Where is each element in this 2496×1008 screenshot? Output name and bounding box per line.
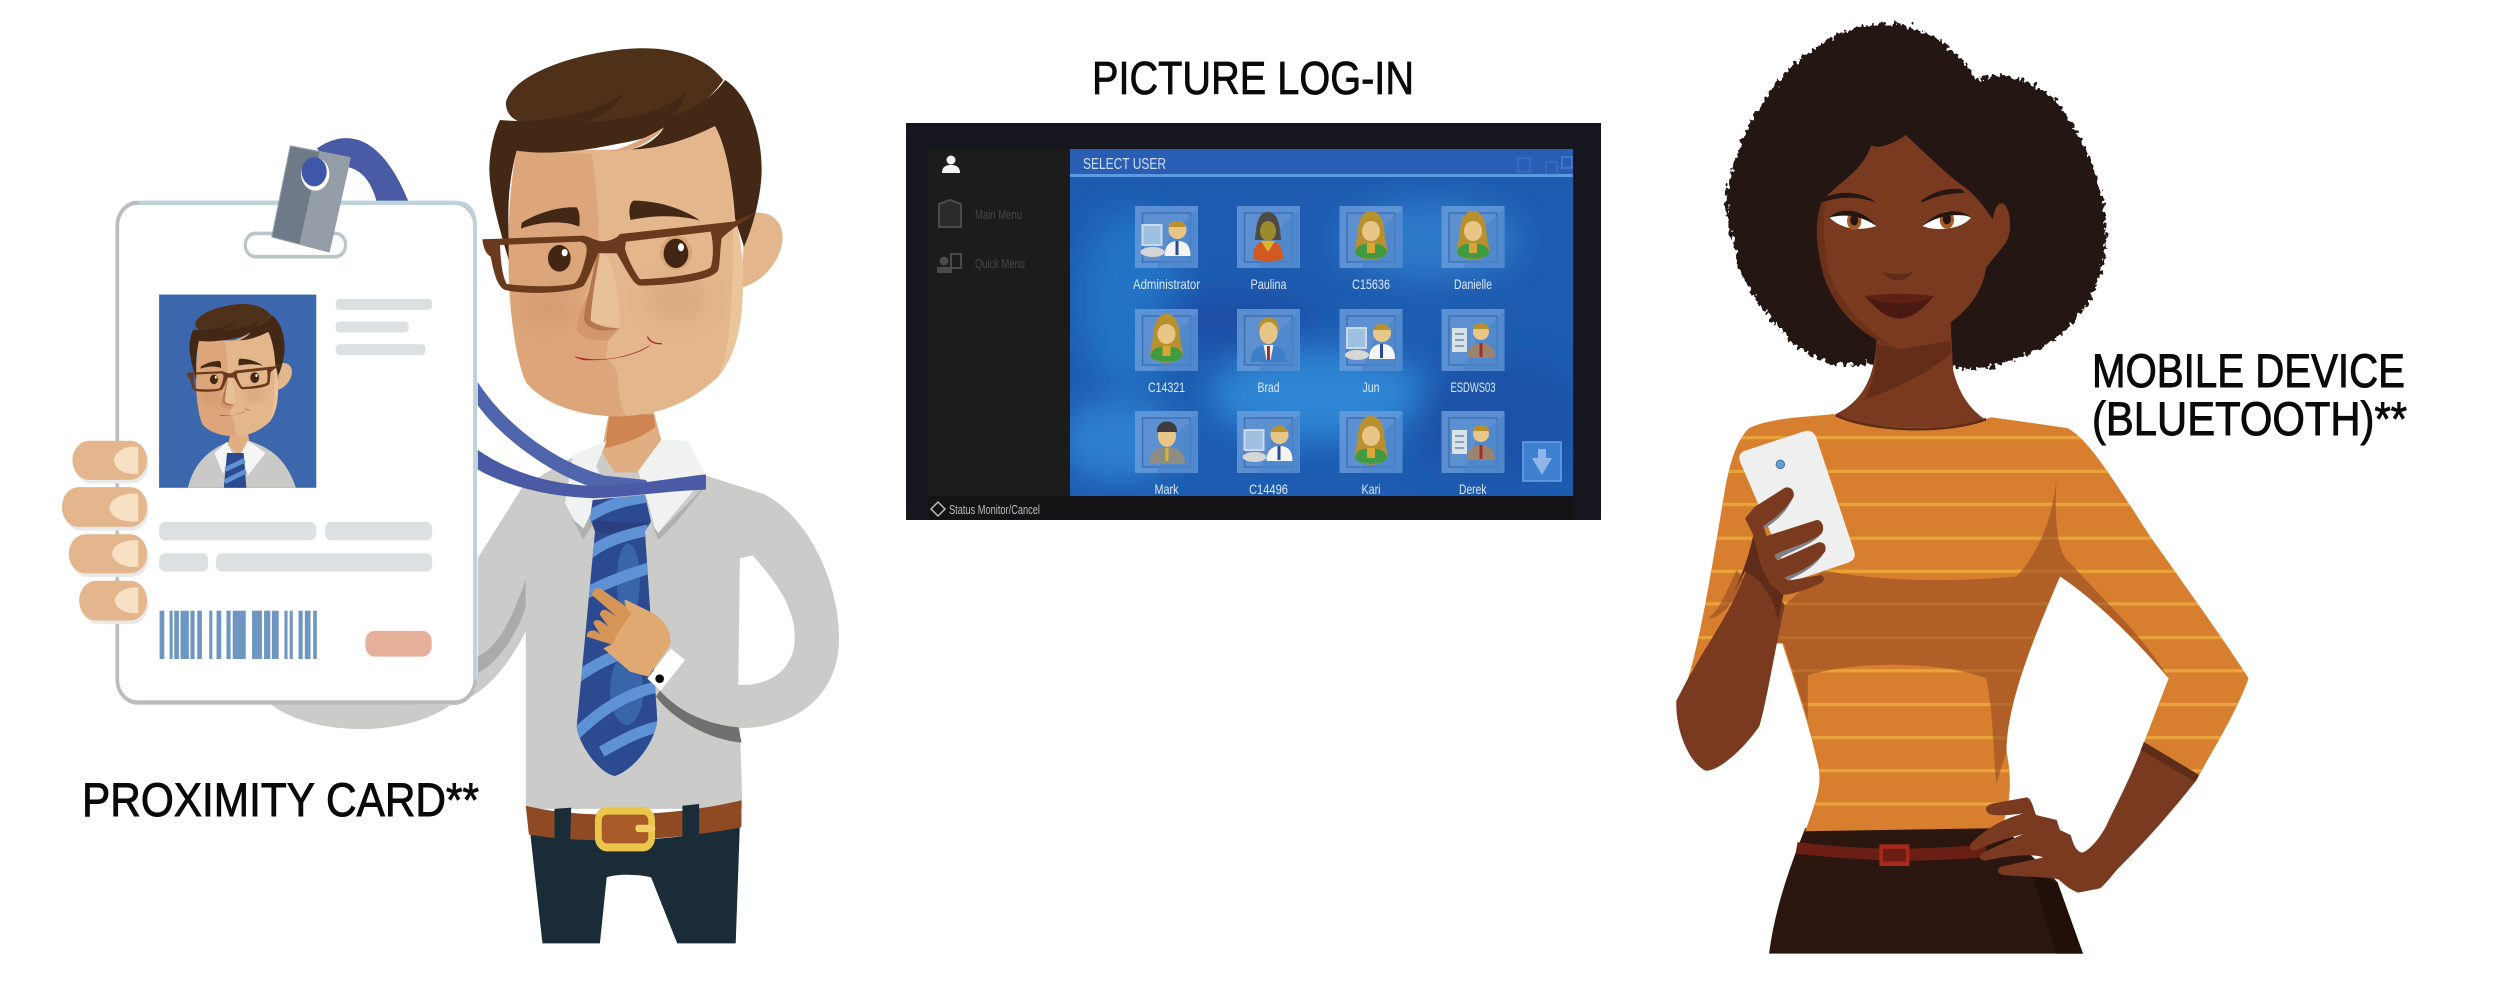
phone <box>1739 431 1855 582</box>
arm cutout <box>738 556 795 685</box>
neckline <box>1836 415 1986 429</box>
user tile: Administrator: Administrator <box>1133 276 1200 292</box>
face <box>1817 135 2007 349</box>
sweater shading <box>1708 478 2169 784</box>
id card <box>62 147 475 702</box>
fingers holding card <box>62 441 149 624</box>
user tile: Paulina <box>1237 206 1300 292</box>
belt <box>526 800 741 840</box>
label: mobile device: (BLUETOOTH)** <box>2092 392 2407 445</box>
eyes <box>1828 211 1971 230</box>
sleeve shadow <box>478 580 526 673</box>
user tile: Jun: Jun <box>1362 379 1380 395</box>
user tile: ESDWS03 <box>1442 309 1504 395</box>
scroll down button <box>1523 442 1561 481</box>
lanyard loop behind card <box>317 138 409 202</box>
belt loops <box>554 804 699 842</box>
phone camera <box>1776 460 1785 469</box>
woman figure <box>1660 23 2272 954</box>
card button <box>365 631 432 657</box>
user tile: Kari: Kari <box>1362 481 1380 497</box>
sweater <box>1688 414 2249 831</box>
pointing hand and cuff <box>587 588 742 743</box>
belt buckle <box>1881 847 1908 864</box>
user tile: Danielle: Danielle <box>1454 276 1492 292</box>
main menu item: Main Menu <box>975 207 1022 222</box>
id photo background and shoulders <box>159 295 316 488</box>
tie <box>570 488 703 780</box>
user tile: Danielle <box>1442 206 1504 292</box>
left forearm <box>1676 561 1785 771</box>
phone hand <box>1745 487 1826 595</box>
label: proximity card: PROXIMITY CARD** <box>82 773 479 826</box>
id photo portrait <box>187 304 292 436</box>
screen sidebar <box>928 149 1070 520</box>
user tile: Brad <box>1237 309 1300 395</box>
user tile: Brad: Brad <box>1258 379 1280 395</box>
man body <box>270 138 839 943</box>
sweater stripes <box>1660 438 2272 804</box>
neck <box>601 411 664 473</box>
user icon <box>942 156 960 173</box>
user tile: C15636 <box>1340 206 1402 292</box>
user tile: Jun <box>1340 309 1402 395</box>
ear <box>1993 203 2010 245</box>
head <box>482 48 783 416</box>
wrist shade <box>1720 535 1783 620</box>
user tile: Derek: Derek <box>1459 481 1487 497</box>
user tile: C15636: C15636 <box>1352 276 1390 292</box>
main menu item <box>939 200 1022 227</box>
nose <box>1882 271 1913 280</box>
blue wallpaper <box>1070 177 1573 496</box>
status bar <box>928 496 1573 520</box>
user tile: C14321: C14321 <box>1148 379 1185 395</box>
lanyard straps <box>478 382 706 498</box>
status monitor <box>931 502 1040 517</box>
collar shadows <box>572 488 703 540</box>
title: select user: SELECT USER <box>1083 156 1166 173</box>
panel: proximity card man <box>62 48 839 943</box>
user tile: Mark <box>1135 411 1198 497</box>
hair <box>1726 23 2106 369</box>
quick menu item <box>937 254 1025 273</box>
heading: picture log-in: PICTURE LOG-IN <box>1092 52 1414 104</box>
badge clip <box>272 147 350 251</box>
quick menu item: Quick Menu <box>975 256 1025 271</box>
phone and hand <box>1720 431 1855 620</box>
lips <box>1865 294 1934 318</box>
user tile: C14321 <box>1135 309 1198 395</box>
trousers <box>530 824 740 943</box>
eyebrows <box>1822 189 1965 203</box>
collar <box>565 439 706 537</box>
neck <box>1833 318 1991 440</box>
shirt and arms <box>270 441 839 809</box>
belt <box>1796 842 1986 861</box>
user tile: Paulina: Paulina <box>1250 276 1287 292</box>
user tile: Administrator <box>1133 206 1200 292</box>
label: mobile device: MOBILE DEVICE <box>2092 344 2405 397</box>
barcode <box>160 611 317 659</box>
status monitor: Status Monitor/Cancel <box>949 502 1040 517</box>
user tile: Derek <box>1442 411 1504 497</box>
title bar <box>1070 149 1573 177</box>
card slot <box>245 233 346 257</box>
user tile: C14496: C14496 <box>1249 481 1288 497</box>
panel: picture log-in <box>906 52 1601 520</box>
screen frame <box>906 123 1601 520</box>
user tile: C14496 <box>1237 411 1300 497</box>
user tile: ESDWS03: ESDWS03 <box>1450 379 1496 395</box>
panel: mobile device woman <box>1660 23 2407 954</box>
label: mobile device <box>2092 344 2407 445</box>
skirt <box>1769 825 2083 954</box>
user tile: Mark: Mark <box>1154 481 1179 497</box>
finger shadows <box>1763 495 1825 581</box>
hip arm and hand <box>1970 742 2199 893</box>
user tile: Kari <box>1340 411 1402 497</box>
belt buckle <box>598 811 655 847</box>
id text lines <box>159 299 432 572</box>
